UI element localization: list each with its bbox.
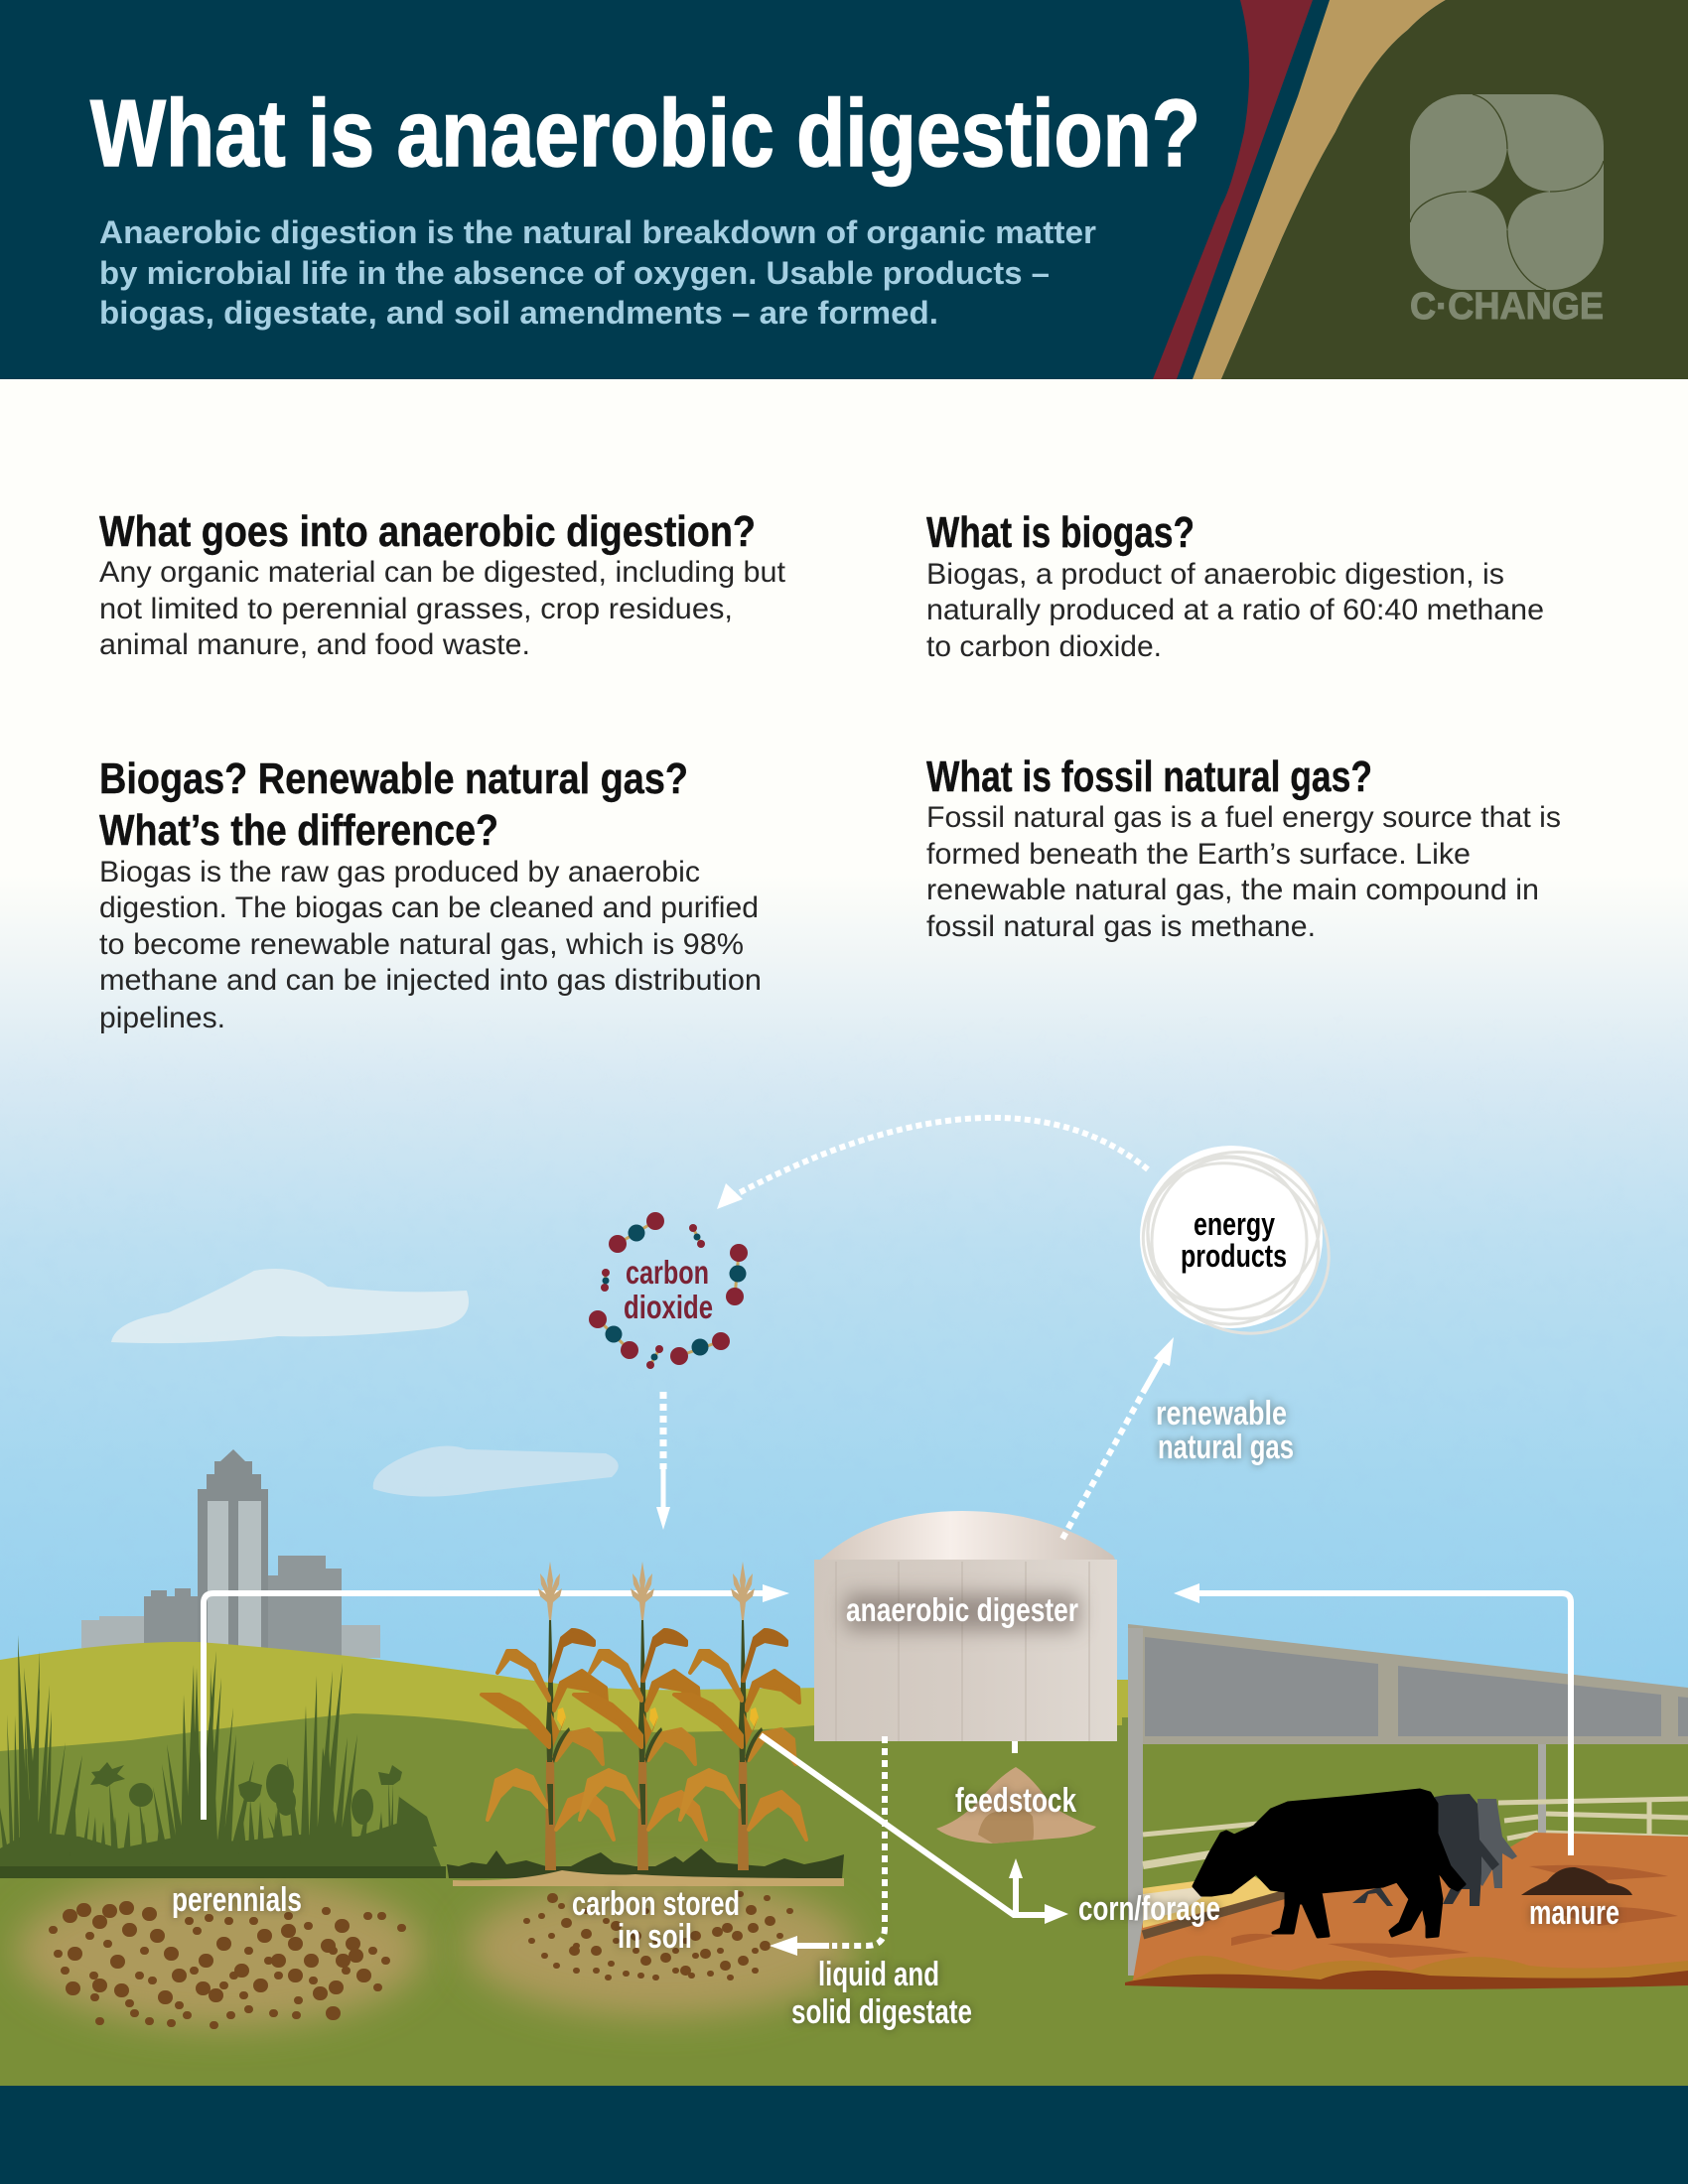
panel: what goes in: not limited to perennial grasses, crop residues, xyxy=(99,593,733,625)
label: manure: manure xyxy=(1529,1894,1619,1932)
label: carbon stored in soil: carbon stored xyxy=(572,1885,740,1923)
label: perennials: perennials xyxy=(172,1881,302,1919)
label: liquid and solid digestate xyxy=(791,1956,972,2031)
panel: fossil natural gas: Fossil natural gas is a fuel energy source that is xyxy=(926,801,1561,834)
arrow: manure to digester xyxy=(1174,1583,1571,1855)
header intro text xyxy=(99,214,1096,331)
fence xyxy=(1143,1799,1688,1865)
soil: carbon stored xyxy=(467,1878,854,2017)
panel: biogas vs renewable natural gas: What’s the difference? xyxy=(99,806,498,855)
soil: perennials xyxy=(17,1873,424,2028)
label: renewable natural gas: renewable xyxy=(1156,1395,1287,1433)
cloud: middle xyxy=(373,1445,619,1497)
panel: fossil natural gas: formed beneath the Earth’s surface. Like xyxy=(926,838,1471,871)
panel: fossil natural gas: What is fossil natural gas? xyxy=(926,752,1372,801)
label: carbon stored in soil xyxy=(572,1885,740,1956)
arrow: energy products to carbon dioxide (dotted) xyxy=(717,1118,1148,1209)
feedstock pile xyxy=(936,1767,1096,1843)
hill: light xyxy=(0,1642,1132,1787)
skyline xyxy=(81,1449,380,1658)
ground xyxy=(0,1713,1122,2086)
soil stones: perennials xyxy=(53,1908,402,2025)
panel: what goes in xyxy=(99,507,786,661)
label: liquid and solid digestate: liquid and xyxy=(818,1956,939,1993)
arrow: digester to energy products (dotted) xyxy=(1062,1337,1174,1539)
header band xyxy=(0,0,1688,379)
soil stones: carbon stored xyxy=(526,1894,790,1978)
cow: front xyxy=(1194,1790,1465,1937)
panel: biogas vs renewable natural gas: Biogas? Renewable natural gas? xyxy=(99,754,688,803)
ground right xyxy=(1122,1717,1688,2086)
corn stalk 3 xyxy=(674,1562,806,1870)
header intro text: by microbial life in the absence of oxygen. Usable products – xyxy=(99,255,1050,291)
panel: what is biogas: to carbon dioxide. xyxy=(926,630,1162,663)
energy products circle xyxy=(1111,1120,1365,1370)
panel: fossil natural gas: renewable natural gas, the main compound in xyxy=(926,874,1539,906)
logo: C-Change xyxy=(1410,94,1604,328)
label: energy products xyxy=(1181,1206,1287,1274)
arrow: digester to feedstock stub xyxy=(1012,1741,1018,1753)
label: liquid and solid digestate: solid digestate xyxy=(791,1993,972,2031)
manure pile xyxy=(1521,1867,1632,1895)
label: anaerobic digester: anaerobic digester xyxy=(846,1591,1078,1628)
panel: what is biogas: What is biogas? xyxy=(926,508,1195,557)
panel: biogas vs renewable natural gas: pipelines. xyxy=(99,1002,225,1034)
plants: perennial grasses and flowers xyxy=(0,1635,446,1878)
panel: what is biogas: Biogas, a product of anaerobic digestion, is xyxy=(926,558,1504,591)
cow: back xyxy=(1477,1799,1517,1888)
cow: middle xyxy=(1352,1794,1499,1906)
corn residue strip xyxy=(447,1848,844,1886)
sky xyxy=(0,920,1688,1690)
panel: what goes in: Any organic material can be digested, including but xyxy=(99,556,786,589)
panel: biogas vs renewable natural gas: digestion. The biogas can be cleaned and purified xyxy=(99,891,759,924)
feed trough xyxy=(1143,1876,1286,1935)
panel: fossil natural gas xyxy=(926,752,1561,943)
corn stalk 1 xyxy=(482,1562,614,1870)
header intro text: biogas, digestate, and soil amendments – are formed. xyxy=(99,295,938,331)
label: energy products: energy xyxy=(1194,1206,1275,1242)
footer band xyxy=(0,2086,1688,2184)
arrow: corn to feedstock xyxy=(761,1735,1068,1924)
panel: what is biogas: naturally produced at a ratio of 60:40 methane xyxy=(926,594,1544,626)
label: feedstock: feedstock xyxy=(955,1782,1076,1820)
carbon dioxide molecule ring xyxy=(589,1212,748,1369)
label: carbon stored in soil: in soil xyxy=(618,1918,692,1956)
panel: biogas vs renewable natural gas: methane and can be injected into gas distribution xyxy=(99,964,762,997)
panel: what is biogas xyxy=(926,508,1544,663)
label: renewable natural gas: natural gas xyxy=(1158,1429,1294,1466)
header intro text: Anaerobic digestion is the natural breakdown of organic matter xyxy=(99,214,1096,250)
label: carbon dioxide xyxy=(624,1254,713,1325)
panel: biogas vs renewable natural gas xyxy=(99,754,762,1034)
arrow: carbon dioxide to crops (dotted) xyxy=(656,1392,670,1530)
shed xyxy=(1128,1624,1688,1982)
panel: what goes in: What goes into anaerobic digestion? xyxy=(99,507,756,556)
label: carbon dioxide: dioxide xyxy=(624,1289,713,1325)
panel: what goes in: animal manure, and food waste. xyxy=(99,628,530,661)
panel: biogas vs renewable natural gas: Biogas is the raw gas produced by anaerobic xyxy=(99,856,700,888)
label: corn/forage: corn/forage xyxy=(1078,1890,1220,1928)
panel: biogas vs renewable natural gas: to become renewable natural gas, which is 98% xyxy=(99,928,744,961)
arrow: perennials to digester xyxy=(204,1584,789,1820)
cloud: left xyxy=(111,1269,469,1343)
logo: C-Change: C·CHANGE xyxy=(1410,286,1604,328)
arrow: digester to soil (dotted) xyxy=(770,1736,885,1956)
panel: fossil natural gas: fossil natural gas is methane. xyxy=(926,910,1316,943)
label: energy products: products xyxy=(1181,1238,1287,1274)
digester xyxy=(814,1511,1117,1741)
title: What is anaerobic digestion? xyxy=(90,80,1200,187)
corn stalk 2 xyxy=(574,1562,706,1870)
pen floor xyxy=(1125,1833,1688,1989)
label: renewable natural gas xyxy=(1156,1395,1294,1466)
label: carbon dioxide: carbon xyxy=(626,1254,709,1291)
